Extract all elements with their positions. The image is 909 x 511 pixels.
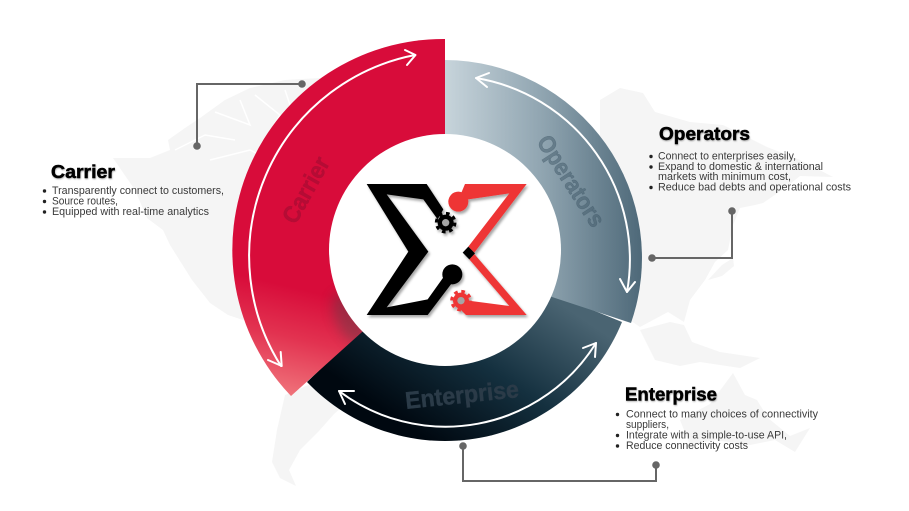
text block: Carrier: Carrier — [51, 161, 115, 182]
ring label: Carrier: Carrier — [277, 152, 336, 228]
text block: Enterprise: Reduce connectivity costs — [626, 440, 748, 452]
logo: red node — [448, 192, 468, 212]
arrow: Carrier — [249, 50, 416, 366]
connector: Carrier — [193, 80, 306, 150]
logo: black gear — [436, 213, 455, 232]
map: Australia — [680, 373, 810, 452]
logo: black diamond — [463, 247, 475, 259]
logo: black sigma — [367, 184, 452, 315]
arrow: Enterprise — [339, 343, 596, 427]
map: South-East Asia — [640, 322, 760, 368]
text block: Operators: Operators — [659, 123, 750, 144]
logo: red gear — [452, 291, 470, 310]
ring segment: Carrier — [232, 39, 445, 396]
text block: Carrier: Source routes, — [52, 196, 118, 208]
text block: Carrier — [43, 161, 224, 218]
connector: Enterprise — [459, 442, 660, 481]
text block: Operators: Connect to enterprises easily, — [658, 150, 796, 162]
logo: red lower arm — [458, 254, 527, 315]
connector: Operators — [648, 207, 736, 262]
ring label: Enterprise: Enterprise — [404, 376, 520, 415]
text block: Carrier: Equipped with real-time analytics — [52, 206, 209, 218]
ring segment: Operators — [445, 60, 642, 323]
center white circle — [329, 134, 561, 366]
carrier inner shadow — [326, 289, 362, 346]
text block: Operators: markets with minimum cost, — [658, 171, 791, 183]
logo: black node — [442, 264, 462, 284]
map: Eurasia — [600, 88, 833, 327]
text block: Operators: Expand to domestic & international — [658, 161, 823, 173]
ring label: Operators: Operators — [531, 130, 610, 232]
map: South America — [272, 380, 350, 486]
map: arctic channels — [175, 90, 295, 165]
text block: Operators — [649, 123, 851, 194]
background world map — [113, 78, 833, 486]
text block: Enterprise: suppliers, — [626, 419, 669, 431]
text block: Carrier: Transparently connect to customers, — [52, 185, 224, 197]
text block: Enterprise: Connect to many choices of connectivity — [626, 409, 818, 421]
text block: Enterprise: Integrate with a simple-to-use API, — [626, 430, 787, 442]
map: North America — [113, 78, 340, 320]
text block: Operators: Reduce bad debts and operational costs — [658, 182, 851, 194]
text block: Enterprise: Enterprise — [625, 384, 717, 404]
arrow: Operators — [476, 73, 635, 292]
text block: Enterprise — [616, 384, 818, 452]
ring segment: Enterprise — [307, 250, 622, 441]
map: Japan — [708, 258, 734, 280]
logo — [367, 184, 527, 315]
logo: red upper arm — [458, 184, 527, 253]
